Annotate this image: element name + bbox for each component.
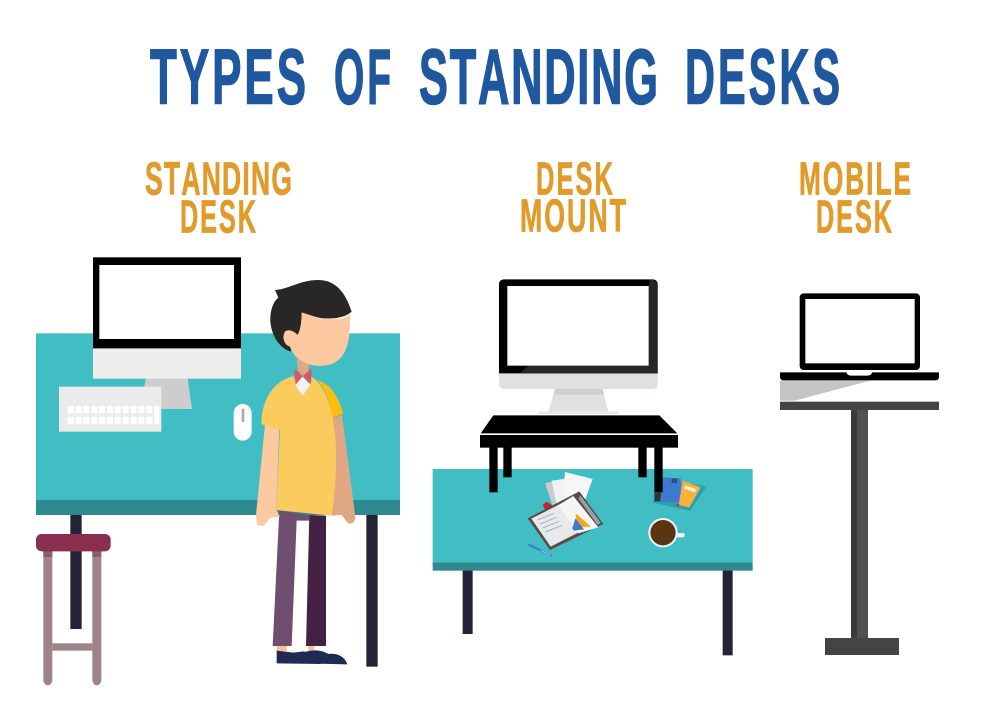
heading: standing desk bbox=[145, 153, 292, 243]
title: STANDING bbox=[419, 34, 658, 121]
heading: mobile desk: MOBILE bbox=[799, 153, 911, 204]
stool bbox=[36, 534, 111, 685]
heading: mobile desk: DESK bbox=[816, 190, 892, 243]
panel: desk mount illustration bbox=[433, 279, 753, 655]
title bbox=[150, 34, 840, 121]
pen bbox=[528, 544, 552, 556]
title: TYPES bbox=[150, 34, 306, 121]
laptop screen bbox=[800, 293, 920, 370]
wedge stand bbox=[780, 381, 870, 401]
person bbox=[256, 280, 355, 664]
riser shelf bbox=[480, 415, 678, 448]
shoes bbox=[277, 650, 347, 664]
table top bbox=[433, 469, 753, 571]
sleeve bbox=[317, 380, 343, 418]
heading: standing desk: DESK bbox=[180, 190, 256, 243]
table legs bbox=[463, 570, 733, 655]
laptop base bbox=[780, 372, 939, 380]
arms bbox=[256, 415, 355, 526]
heading: desk mount: MOUNT bbox=[520, 190, 626, 241]
coffee cup bbox=[648, 518, 685, 547]
panel: standing desk illustration bbox=[36, 257, 400, 685]
title: OF bbox=[334, 34, 391, 121]
monitor bbox=[499, 279, 658, 414]
riser front legs bbox=[489, 447, 663, 492]
neck bbox=[297, 358, 309, 376]
desk top bbox=[36, 333, 400, 515]
trousers bbox=[273, 511, 326, 646]
pole and base bbox=[825, 410, 899, 655]
heading: desk mount bbox=[520, 153, 626, 241]
panel: mobile desk illustration bbox=[780, 293, 939, 410]
riser back legs bbox=[503, 447, 647, 477]
ankles bbox=[277, 646, 314, 651]
hair bbox=[270, 280, 352, 352]
mouse bbox=[234, 404, 252, 441]
heading: standing desk: STANDING bbox=[145, 153, 292, 204]
shelf bbox=[780, 402, 939, 410]
heading: mobile desk bbox=[799, 153, 911, 243]
papers bbox=[545, 472, 593, 507]
notebook bbox=[528, 491, 603, 550]
heading: desk mount: DESK bbox=[536, 153, 613, 204]
books bbox=[653, 477, 707, 511]
desk legs bbox=[70, 515, 378, 667]
title: DESKS bbox=[685, 34, 840, 121]
monitor bbox=[93, 257, 241, 409]
shirt bbox=[261, 376, 336, 516]
keyboard bbox=[59, 387, 161, 432]
collar bbox=[294, 368, 312, 396]
face bbox=[283, 313, 350, 366]
